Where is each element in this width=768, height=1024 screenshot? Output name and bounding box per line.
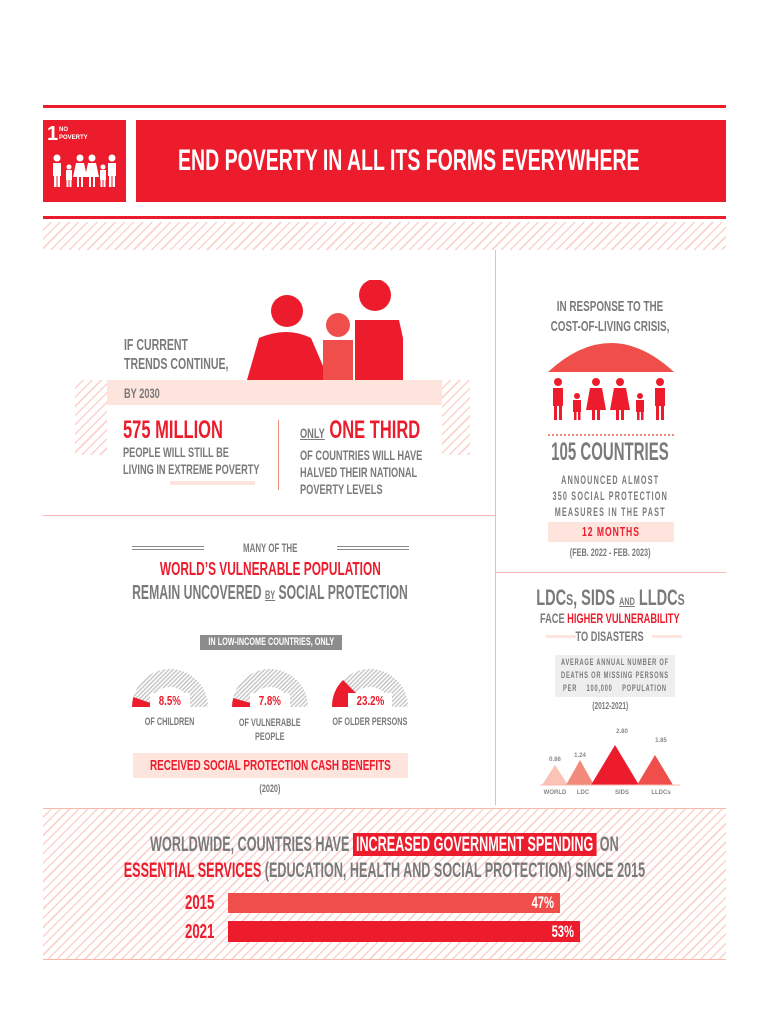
panel: cost-of-living: IN RESPONSE TO THE xyxy=(557,298,663,315)
goal icon: 1 xyxy=(47,123,58,145)
panel: government spending xyxy=(43,808,726,960)
panel: disasters: AVERAGE ANNUAL NUMBER OF xyxy=(561,657,669,668)
chart: triangles: 0.86 xyxy=(549,757,561,763)
chart: triangles: 1.24 xyxy=(574,753,586,759)
bar chart xyxy=(185,892,580,943)
panel: cost-of-living: (FEB. 2022 - FEB. 2023) xyxy=(570,547,650,559)
panel: disasters: TO DISASTERS xyxy=(576,628,644,644)
goal icon: NO xyxy=(59,127,68,133)
stat: one third: OF COUNTRIES WILL HAVE xyxy=(300,447,422,463)
panel: cost-of-living: ANNOUNCED ALMOST xyxy=(561,473,659,487)
panel: social protection: RECEIVED SOCIAL PROTECTION CASH BENEFITS xyxy=(150,757,391,774)
icon: umbrella family xyxy=(548,343,674,420)
heading: WORLDWIDE, COUNTRIES HAVE INCREASED GOVERNMENT SPENDING ON xyxy=(150,833,619,856)
text: if current trends: TRENDS CONTINUE, xyxy=(124,356,228,373)
bar chart: 47% xyxy=(532,893,554,912)
panel: social protection: PEOPLE xyxy=(255,731,285,743)
panel: social protection: MANY OF THE xyxy=(243,541,297,555)
stat: 575 million: PEOPLE WILL STILL BE xyxy=(123,444,229,460)
stat: one third: ONLY ONE THIRD xyxy=(300,416,420,444)
stat: 575 million: 575 MILLION xyxy=(123,416,223,444)
chart: triangles: 2.80 xyxy=(616,729,628,735)
panel: social protection: (2020) xyxy=(259,783,280,795)
stat: one third: HALVED THEIR NATIONAL xyxy=(300,464,417,480)
panel: social protection: OF OLDER PERSONS xyxy=(332,716,408,728)
panel: cost-of-living: 350 SOCIAL PROTECTION xyxy=(552,489,668,503)
title: END POVERTY IN ALL ITS FORMS EVERYWHERE xyxy=(178,144,640,177)
chart: triangles: SIDS xyxy=(615,790,629,796)
panel: disasters: FACE HIGHER VULNERABILITY xyxy=(540,610,680,626)
chart: triangles: LLDCs xyxy=(651,790,671,796)
panel: social protection: 8.5% xyxy=(159,693,181,708)
panel: social protection: OF CHILDREN xyxy=(145,716,195,728)
chart: triangles: 1.85 xyxy=(655,738,667,744)
panel: cost-of-living xyxy=(548,298,674,559)
bar chart: 2015 xyxy=(185,892,214,914)
stat: 575 million: LIVING IN EXTREME POVERTY xyxy=(123,461,260,477)
panel: social protection: 7.8% xyxy=(259,693,281,708)
panel: social protection: 23.2% xyxy=(356,693,384,708)
panel: disasters xyxy=(536,585,684,796)
panel: social protection: REMAIN UNCOVERED BY SOCIAL PROTECTION xyxy=(132,582,408,604)
panel: 2030 projection xyxy=(75,280,470,497)
panel: social protection: OF VULNERABLE xyxy=(239,717,301,729)
panel: social protection xyxy=(132,541,409,795)
bar chart: 53% xyxy=(552,922,574,941)
text: by 2030: BY 2030 xyxy=(124,385,160,401)
icon: family xyxy=(247,280,403,380)
goal icon: POVERTY xyxy=(59,135,88,141)
panel: disasters: LDCS, SIDS AND LLDCS xyxy=(536,585,684,610)
panel: disasters: DEATHS OR MISSING PERSONS xyxy=(561,670,669,681)
text: if current trends: IF CURRENT xyxy=(124,337,188,354)
panel: disasters: PER 100,000 POPULATION xyxy=(563,683,667,694)
panel: social protection: IN LOW-INCOME COUNTRIES, ONLY xyxy=(208,636,334,648)
stat: 105 countries: 105 COUNTRIES xyxy=(551,438,669,466)
stat: 575 million xyxy=(123,416,260,477)
panel: cost-of-living: MEASURES IN THE PAST xyxy=(554,505,666,519)
heading: WORLD’S VULNERABLE POPULATION xyxy=(160,559,380,579)
title xyxy=(136,120,726,202)
chart: gauges xyxy=(132,669,408,707)
panel: cost-of-living: 12 MONTHS xyxy=(582,524,640,539)
text: if current trends xyxy=(124,337,228,373)
stat: one third xyxy=(300,416,422,497)
chart: triangles: LDC xyxy=(577,790,590,796)
goal icon xyxy=(43,120,126,202)
bar chart: 2021 xyxy=(185,921,214,943)
panel: government spending: ESSENTIAL SERVICES (EDUCATION, HEALTH AND SOCIAL PROTECTION) SINCE 2015 xyxy=(124,859,645,882)
chart: triangles: WORLD xyxy=(544,790,567,796)
chart: triangles xyxy=(540,728,680,796)
panel: disasters: (2012-2021) xyxy=(592,701,628,712)
stat: one third: POVERTY LEVELS xyxy=(300,481,382,497)
panel: cost-of-living: COST-OF-LIVING CRISIS, xyxy=(551,318,669,335)
